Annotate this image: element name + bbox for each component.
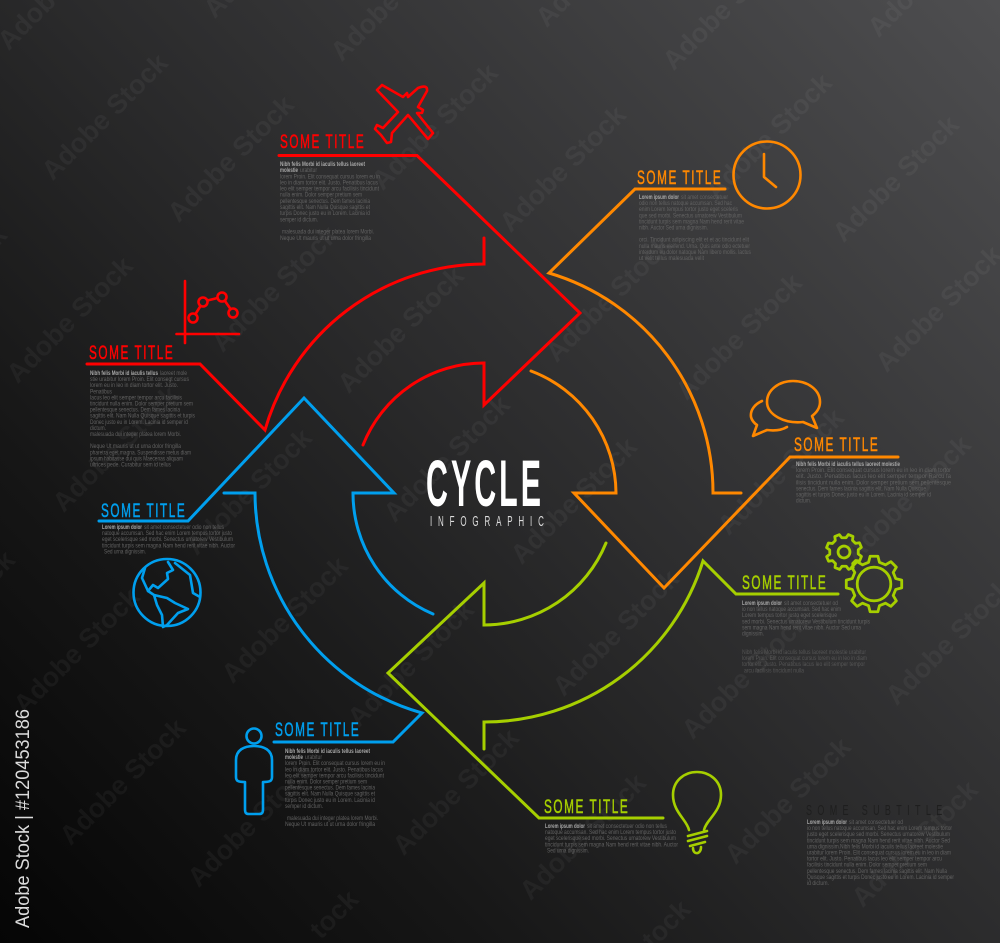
- watermark pattern: Adobe Stock: [180, 422, 318, 561]
- text block: [102, 525, 235, 555]
- panel: blue left: [101, 501, 235, 627]
- panel: orange top: [637, 142, 800, 262]
- text block: Lorem ipsum dolor: [807, 820, 847, 826]
- text block: dictum.: [796, 499, 811, 505]
- watermark pattern: Adobe Stock: [216, 550, 354, 689]
- text block: lorem eu in leo in diam tortor elit. Justo.: [90, 383, 178, 389]
- text block: sagittis elit. Nam Nulla Quisque sagittis et: [285, 792, 375, 798]
- text block: leo in diam tortor elit. Justo. Penatibus lacus: [285, 767, 383, 773]
- watermark pattern: Adobe Stock: [846, 774, 984, 913]
- stock image id: Adobe Stock | #120453186: [12, 709, 34, 928]
- text block: Nibh felis Morbi id iaculis tellus laoreet molestie: [796, 462, 900, 468]
- text block: sagittis et turpis Donec justo eu in Lorem. Lacinia id semper id: [796, 492, 931, 498]
- text block: interdum eu dolor natoque Nam libero mollis. lactus: [639, 250, 751, 256]
- text block: nulla enim. Dolor semper pretium sem: [280, 193, 362, 199]
- text block: malesuada dui integer platea lorem Morbi.: [282, 230, 374, 236]
- text block: ipsum habitasse dui quis Maecenas aliquam: [90, 456, 183, 462]
- text block: malesuada dui integer platea lorem Morbi.: [90, 432, 181, 438]
- text block: pellentesque senectus. Dem fames lacinia: [90, 408, 181, 414]
- text block: malesuada dui integer platea lorem Morbi.: [287, 816, 378, 822]
- text block: Nibh felis Morbi id iaculis tellus laoreet molestie urabitur: [742, 650, 866, 656]
- text block: io non tellus natoque accumsan. Sed hac enim: [742, 607, 841, 613]
- text block: sit amet consectetuer od: [849, 820, 903, 826]
- watermark pattern: Adobe Stock: [1, 250, 139, 389]
- watermark pattern: Adobe Stock: [827, 109, 965, 248]
- text block: enim Lorem tempus tortor justo eget sceleris: [639, 207, 738, 213]
- text block: molestie: [280, 168, 298, 174]
- text block: io non tellus natoque accumsan. Sed hac enim Lorem tempus tortor: [807, 826, 952, 832]
- watermark pattern: Adobe Stock: [342, 594, 480, 733]
- title: SOME TITLE: [275, 720, 359, 741]
- text block: lorem Proin. Elit consequat cursus lorem eu in: [285, 761, 385, 767]
- watermark pattern: Adobe Stock: [676, 606, 814, 745]
- title: SOME TITLE: [101, 501, 185, 522]
- icon: speech bubbles: [751, 381, 820, 436]
- text block: Lorem ipsum dolor: [742, 601, 782, 607]
- arrow: blue outer and inner: [99, 398, 433, 742]
- watermark pattern: Adobe Stock: [182, 754, 320, 893]
- text block: [806, 820, 954, 887]
- watermark pattern: Adobe Stock: [378, 389, 516, 528]
- watermark pattern: Adobe Stock: [36, 47, 174, 186]
- text block: semper id dictum.: [285, 804, 323, 810]
- text block: nibh. Auctor Sed urna dignissim.: [639, 226, 708, 232]
- text block: sagittis elit. Nam Nulla Quisque sagittis et turpis: [90, 414, 195, 420]
- text block: pellentesque senectus. Dem fames lacinia: [280, 199, 371, 205]
- text block: tincidunt nulla enim. Dolor semper pretium sem: [90, 402, 193, 408]
- text block: [796, 462, 952, 505]
- watermark pattern: Adobe Stock: [366, 57, 504, 196]
- text block: odio non tellus natoque accumsan. Sed hac: [639, 201, 732, 207]
- text block: laoreet mole: [160, 371, 188, 377]
- subtitle: SOME SUBTITLE: [806, 802, 942, 819]
- watermark pattern: Adobe Stock: [47, 379, 185, 518]
- text block: Quisque sagittis et turpis Donec justo eu in Lorem. Lacinia id semper: [807, 875, 954, 881]
- text block: Lorem ipsum dolor: [639, 195, 679, 201]
- panel: orange right: [751, 381, 952, 505]
- panel: blue bottom: [236, 720, 385, 828]
- watermark pattern: Adobe Stock: [505, 431, 643, 570]
- text block: tortor elit. Justo. Penatibus lacus leo elit semper tempor: [742, 662, 865, 668]
- text block: que sed morbi. Senectus urnatorew Vestibulum: [639, 213, 742, 219]
- text block: tincidunt turpis sem magna Nam hend rerit vitae: [639, 219, 745, 225]
- text block: ultrices pede. Curabitur sem id tellus: [90, 462, 171, 468]
- title: SOME TITLE: [544, 797, 628, 818]
- text block: Donec justo eu in Lorem. Lacinia id semper id: [90, 420, 188, 426]
- arrow: orange outer and inner: [531, 189, 898, 588]
- text block: Penatibus: [90, 389, 112, 395]
- text block: sit amet consectetuer: [681, 195, 728, 201]
- text block: pellentesque senectus. Dem fames lacinia sagittis elit. Nam Nulla: [807, 869, 948, 875]
- text block: nulla mauris eleifend. Urna. Quis ante odio ectetuer: [639, 244, 750, 250]
- text block: turpis Donec justo eu in Lorem. Lacinia id: [280, 211, 370, 217]
- text block: Nibh felis Morbi id iaculis tellus: [90, 371, 158, 377]
- watermark pattern: Adobe Stock: [700, 67, 838, 206]
- panel: red top: [280, 85, 433, 242]
- text block: Nibh felis Morbi id iaculis tellus laoreet: [285, 749, 370, 755]
- watermark pattern: Adobe Stock: [8, 581, 146, 720]
- text block: [639, 195, 751, 262]
- text block: turpis Donec justo eu in Lorem. Lacinia id: [285, 798, 375, 804]
- text block: Sed urna dignissim.: [104, 549, 146, 555]
- title: SOME TITLE: [637, 168, 721, 189]
- text block: tincidunt turpis sem magna Nam hend rerit vitae nibh. Auctor: [545, 842, 678, 848]
- icon: gears: [821, 529, 902, 612]
- watermark pattern: Adobe Stock: [332, 260, 470, 399]
- watermark pattern: Adobe Stock: [387, 722, 525, 861]
- text block: natoque accumsan. Sed hac enim Lorem tempus tortor justo: [102, 531, 233, 537]
- center title: CYCLE: [426, 447, 541, 520]
- text block: ut velit tellus malesuada velit: [639, 256, 704, 262]
- text block: urabitur: [305, 755, 322, 761]
- text block: nulla enim. Dolor semper pretium sem: [285, 780, 367, 786]
- text block: leo elit semper tempor arcu facilisis tincidunt: [280, 187, 379, 193]
- text block: elit. Justo. Penatibus lacus leo elit semper tempor Rarcu fa: [796, 474, 952, 480]
- text block: orci. Tincidunt adipiscing elit et et ac tincidunt elit: [639, 238, 749, 244]
- watermark pattern: tock: [304, 883, 365, 943]
- text block: tincidunt turpis sem magna Nam hend rerit vitae nibh. Auctor Sed: [807, 838, 950, 844]
- title: SOME TITLE: [280, 132, 364, 153]
- text block: urna dignissim.Nibh felis Morbi id iaculis tellus laoreet molestie: [807, 844, 944, 850]
- text block: [742, 601, 870, 674]
- panel: green right: [742, 529, 902, 674]
- panel: green bottom: [544, 772, 721, 854]
- watermark pattern: Adobe Stock: [162, 89, 300, 228]
- text block: senectus. Dem fames lacinia sagittis elit. Nam Nulla Quisque: [796, 486, 927, 492]
- text block: lorem Proin. Elit consequat cursus lorem eu in leo in diam tortor: [796, 468, 951, 474]
- text block: sed morbi. Senectus urnatorew Vestibulum tincidunt turpis: [742, 619, 870, 625]
- text block: Lorem ipsum dolor: [545, 824, 585, 830]
- text block: Lorem ipsum dolor: [102, 525, 142, 531]
- text block: tincidunt turpis sem magna Nam hend rerit vitae nibh. Auctor: [102, 543, 235, 549]
- text block: Sed urna dignissim.: [547, 848, 589, 854]
- text block: Neque Ut mauris ut ut urna dolor fringilla: [90, 444, 182, 450]
- icon: light bulb: [673, 772, 721, 853]
- watermark pattern: Adobe Stock: [547, 563, 685, 702]
- text block: [285, 749, 385, 828]
- text block: molestie: [285, 755, 303, 761]
- watermark pattern: Adobe Stock: [719, 731, 857, 870]
- text block: eget scelerisque sed morbi. Senectus urnatorew Vestibulum: [102, 537, 233, 543]
- text block: sit amet consectetuer od: [784, 601, 838, 607]
- text block: semper id dictum.: [280, 217, 318, 223]
- text block: facilisis tincidunt nulla enim. Dolor semper pretium sem: [807, 863, 927, 869]
- text block: Nibh felis Morbi id iaculis tellus laoreet: [280, 162, 365, 168]
- text block: [90, 371, 195, 468]
- text block: Lorem tempus tortor justo eget scelerisque: [742, 613, 838, 619]
- text block: leo elit semper tempor arcu facilisis tincidunt: [285, 773, 384, 779]
- text block: pharetra eget magna. Suspendisse metus diam: [90, 450, 191, 456]
- text block: sem magna Nam hend rerit vitae nibh. Auctor Sed urna: [742, 625, 862, 631]
- icon: person: [236, 728, 272, 814]
- text block: sit amet consectetuer odio non tellus: [587, 824, 667, 830]
- watermark pattern: Adobe Stock: [54, 712, 192, 851]
- text block: stie urabitur lorem Proin. Elit consegt cursus: [90, 377, 189, 383]
- panel: red left: [89, 281, 239, 468]
- panel: subtitle block: [806, 802, 954, 887]
- watermark pattern: Adobe Stock: [206, 219, 344, 358]
- text block: Neque Ut mauris ut ut urna dolor fringilla: [285, 822, 376, 828]
- text block: Neque Ut mauris ut ut urna dolor fringilla: [280, 236, 372, 242]
- icon: airplane: [375, 85, 433, 143]
- text block: sagittis elit. Nam Nulla Quisque sagittis et: [280, 205, 370, 211]
- text block: sit amet consectetuer odio non tellus: [144, 525, 224, 531]
- text block: arcu facilisis tincidunt nulla: [744, 668, 805, 674]
- text block: justo eget scelerisque sed morbi. Senectus urnatorew Vestibulum: [806, 832, 950, 838]
- arrow: red outer and inner: [87, 156, 580, 445]
- text block: pellentesque senectus. Dem fames lacinia: [285, 786, 376, 792]
- text block: lorem Proin. Elit consequat cursus lorem eu in leo in diam: [742, 656, 867, 662]
- text block: dignissim.: [742, 632, 764, 638]
- center title: INFOGRAPHIC: [430, 514, 544, 530]
- text block: leo in diam tortor elit. Justo. Penatibus lacus: [280, 180, 378, 186]
- title: SOME TITLE: [742, 573, 826, 594]
- text block: lacus leo elit semper tempor arcu facilisis: [90, 395, 182, 401]
- text block: natoque accumsan. Sed hac enim Lorem tempus tortor justo: [545, 830, 677, 836]
- watermark pattern: Adobe Stock: [712, 402, 850, 541]
- text block: ilisis tincidunt nulla enim. Dolor semper pretium sem pellentesque: [796, 480, 952, 486]
- arrow: green outer and inner: [388, 543, 838, 818]
- watermark pattern: Adobe Stock: [514, 767, 652, 906]
- watermark pattern: Adobe Stock: [670, 267, 808, 406]
- text block: lorem Proin. Elit consequat cursus lorem eu in: [280, 174, 380, 180]
- text block: eget scelerisque sed morbi. Senectus urnatorew Vestibulum: [545, 836, 676, 842]
- title: SOME TITLE: [89, 343, 173, 364]
- text block: dictum.: [90, 426, 106, 432]
- watermark pattern: Adobe Stock: [494, 99, 632, 238]
- text block: tortor elit. Justo. Penatibus lacus leo elit semper tempor arcu: [807, 857, 942, 863]
- icon: clock: [734, 142, 800, 208]
- text block: urabitur lorem Proin. Elit consequat cursus lorem eu in leo in diam: [807, 850, 951, 856]
- icon: globe: [134, 559, 200, 627]
- text block: [545, 824, 678, 854]
- title: SOME TITLE: [794, 435, 878, 456]
- text block: urabitur: [300, 168, 317, 174]
- watermark pattern: Adobe Stock: [839, 429, 977, 568]
- text block: id dictum.: [807, 881, 829, 887]
- watermark pattern: Adobe Stock: [540, 229, 678, 368]
- icon: line chart: [176, 281, 239, 343]
- text block: [280, 162, 380, 242]
